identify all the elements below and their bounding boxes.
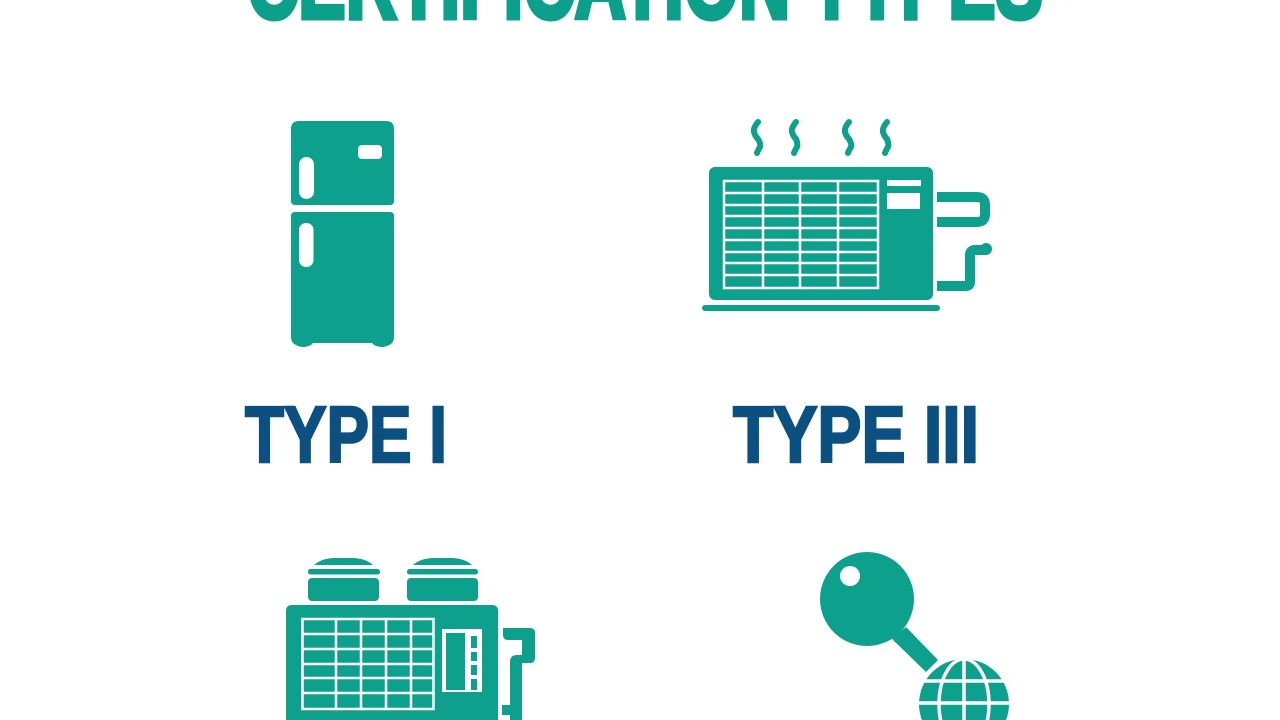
label: Type I: TYPE I [245, 390, 447, 479]
icon: outdoor air conditioner with steam (Type III) [702, 122, 992, 311]
globe [915, 655, 1013, 720]
icon: key and globe (Type IV / universal) [820, 552, 1013, 720]
base plate [702, 305, 940, 311]
unit body [286, 605, 498, 720]
pipe valve [980, 243, 992, 255]
coil grid [302, 619, 434, 709]
panel labels [887, 180, 921, 209]
coil grid [724, 181, 878, 288]
unit body [709, 167, 933, 300]
pipes [937, 197, 987, 286]
fan left [308, 558, 380, 601]
icon: commercial condenser unit with fans (Type II) [286, 558, 535, 720]
fan right [407, 558, 478, 601]
label: Type III: TYPE III [733, 390, 979, 479]
key hole [840, 566, 860, 586]
side control panel [442, 629, 482, 692]
steam lines [754, 122, 888, 153]
pipe [502, 628, 535, 720]
key shaft [892, 627, 938, 672]
key head [820, 552, 914, 646]
icon: refrigerator (Type I) [291, 121, 394, 347]
